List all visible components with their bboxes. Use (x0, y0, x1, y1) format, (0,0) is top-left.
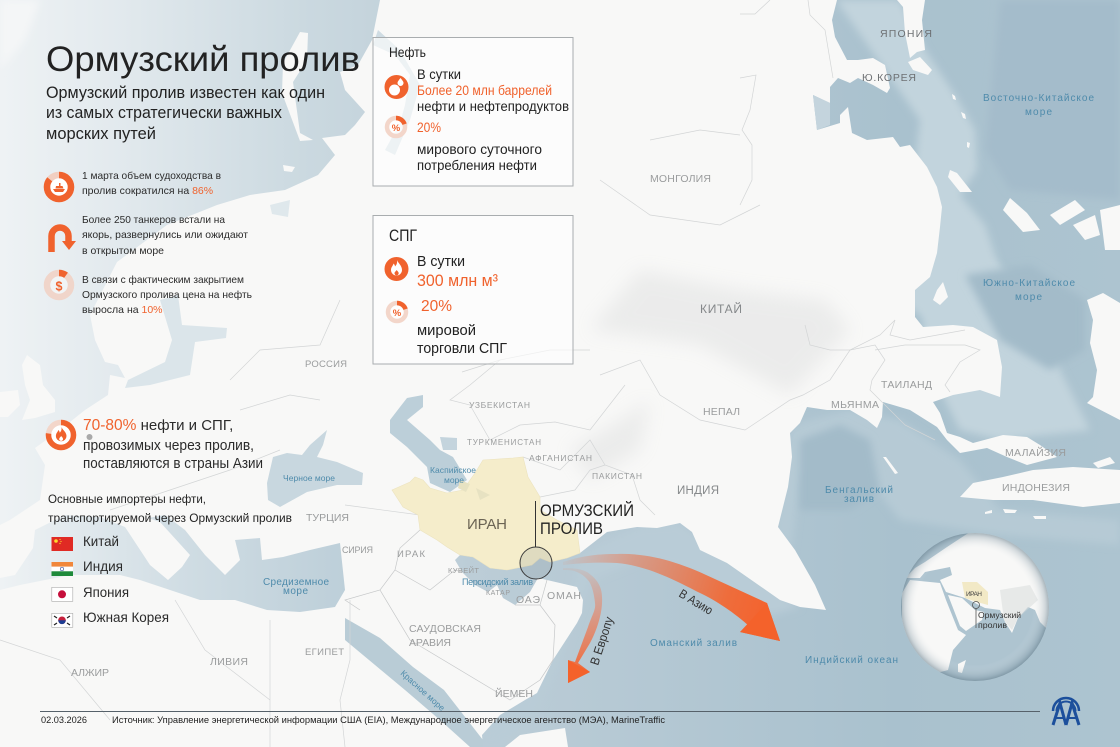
text: oil price: В связи с фактическим закрытием (82, 274, 244, 286)
text: tankers: якорь, развернулись или ожидают (82, 229, 248, 241)
label: Japan: Япония (83, 584, 129, 600)
map labels: seas: залив (844, 494, 874, 505)
map labels: countries: СИРИЯ (342, 545, 373, 555)
arctic haze (0, 0, 40, 70)
map labels: countries: ЕГИПЕТ (305, 647, 344, 658)
label: South Korea: Южная Корея (83, 609, 169, 625)
map labels: countries: ТУРКМЕНИСТАН (467, 438, 541, 447)
flag: Japan (52, 587, 73, 601)
icon: LNG percent ring (388, 303, 406, 321)
map labels: seas: Индийский океан (805, 655, 898, 666)
text: LNG share: торговли СПГ (417, 341, 507, 357)
map labels: seas: Черное море (283, 473, 335, 483)
importers list (52, 533, 169, 627)
continental shelf shading (470, 0, 1120, 747)
map labels: countries: МЬЯНМА (831, 399, 879, 411)
map labels: seas: Каспийское (430, 465, 476, 475)
map labels: countries: КУВЕЙТ (448, 566, 479, 575)
label: China: Китай (83, 533, 119, 549)
Iran label: ИРАН (467, 516, 507, 533)
text: exports to Asia: поставляются в страны Азии (83, 455, 263, 472)
map labels: countries: ЯПОНИЯ (880, 28, 932, 40)
icon: dollar ring: $ (56, 280, 63, 294)
label: to Asia: В Азию (676, 587, 715, 618)
subtitle: морских путей (46, 125, 156, 143)
globe marker (972, 602, 980, 628)
fact: exports to Asia (48, 417, 263, 472)
text: shipping traffic (82, 170, 221, 197)
icon: flame (384, 257, 408, 281)
text: oil price: Ормузского пролива цена на нефть (82, 289, 253, 301)
label: Strait of Hormuz (540, 501, 634, 538)
arrow: to Europe (563, 568, 617, 683)
text: oil per day: нефти и нефтепродуктов (417, 99, 569, 114)
map labels: seas: Красное море (399, 668, 447, 713)
footer rule (40, 710, 1040, 712)
map labels: seas: Средиземное (263, 577, 329, 588)
text: exports to Asia (83, 417, 263, 472)
text: LNG per day: В сутки (417, 254, 465, 270)
map labels: countries: НЕПАЛ (703, 406, 740, 418)
Iran on globe (962, 582, 988, 605)
icon: flame ring (48, 422, 92, 448)
importers heading (48, 492, 292, 525)
map labels: countries: УЗБЕКИСТАН (469, 400, 530, 410)
text: oil price (82, 274, 253, 316)
map labels: countries: ИРАК (397, 549, 425, 560)
importers heading: транспортируемой через Ормузский пролив (48, 511, 292, 525)
map labels: countries: ЙЕМЕН (495, 687, 533, 700)
panel: LNG (373, 216, 573, 364)
fact: tankers (52, 214, 248, 257)
heading: oil: Нефть (389, 45, 426, 60)
fact: oil price (47, 273, 253, 316)
map labels: seas: море (283, 586, 308, 597)
map labels: countries: Ю.КОРЕЯ (862, 72, 916, 84)
map labels: countries: РОССИЯ (305, 359, 347, 370)
map labels: countries: МАЛАЙЗИЯ (1005, 446, 1066, 459)
map labels: countries: ИНДИЯ (677, 485, 719, 497)
text: tankers: Более 250 танкеров встали на (82, 214, 225, 226)
fact: shipping traffic (47, 170, 221, 199)
map labels: countries: КИТАЙ (700, 301, 742, 316)
text: shipping traffic: 1 марта объем судоходства в (82, 170, 221, 182)
title: Ормузский пролив (46, 40, 360, 79)
icon: dollar ring (47, 273, 71, 297)
label: to Europe: В Европу (588, 614, 617, 667)
text: oil per day: В сутки (417, 67, 461, 82)
text: oil share: 20% (417, 120, 441, 135)
map labels: countries: КАТАР (486, 590, 510, 597)
map labels: countries: АРАВИЯ (409, 637, 451, 649)
globe label: Iran: ИРАН (966, 591, 982, 598)
text: tankers: в открытом море (82, 245, 164, 257)
flag: China (52, 537, 73, 551)
text: LNG per day (417, 254, 498, 290)
text: oil per day (417, 67, 569, 114)
map labels: seas: Южно-Китайское (983, 278, 1075, 289)
map labels: countries: САУДОВСКАЯ (409, 623, 481, 635)
map labels: seas: Оманский залив (650, 638, 737, 649)
icon: oil percent ring: % (392, 123, 401, 134)
footer: source: Источник: Управление энергетической информации США (EIA), Международное энергетическое агентство (МЭА), MarineTraffic (112, 715, 666, 725)
subtitle: Ормузский пролив известен как один (46, 84, 325, 102)
map labels: countries: ПАКИСТАН (592, 471, 642, 481)
text: oil price: выросла на 10% (82, 304, 163, 316)
label: Strait of Hormuz: ПРОЛИВ (540, 519, 603, 538)
terrain shading (570, 270, 850, 480)
map labels: countries: ОАЭ (516, 594, 540, 606)
text: LNG per day: 300 млн м³ (417, 271, 498, 290)
text: oil per day: Более 20 млн баррелей (417, 83, 552, 98)
map labels: countries: ОМАН (547, 590, 581, 602)
map labels: seas: Персидский залив (462, 577, 533, 587)
inland seas (0, 30, 830, 747)
text: oil share: потребления нефти (417, 158, 537, 173)
text: exports to Asia: провозимых через пролив, (83, 437, 254, 454)
text: exports to Asia: 70-80% нефти и СПГ, (83, 417, 233, 434)
text: LNG share (417, 298, 507, 357)
deep water (965, 265, 1085, 370)
text: LNG share: мировой (417, 323, 476, 339)
icon: U-turn arrow (52, 228, 76, 252)
icon: LNG percent ring: % (393, 308, 402, 319)
label: India: Индия (83, 558, 123, 574)
map labels: seas: Восточно-Китайское (983, 93, 1094, 104)
text: LNG share: 20% (421, 298, 452, 315)
map labels: seas: Бенгальский (825, 485, 893, 496)
map labels: countries: МОНГОЛИЯ (650, 173, 711, 185)
map labels: countries: АФГАНИСТАН (529, 453, 592, 463)
footer: date: 02.03.2026 (41, 715, 87, 725)
callout: Strait of Hormuz (520, 501, 634, 579)
icon: ship ring (47, 175, 71, 199)
text: oil share (417, 120, 542, 173)
globe label: Strait of Hormuz: Ормузский (978, 610, 1021, 620)
map labels: seas: море (1015, 292, 1042, 303)
globe label: Strait of Hormuz: пролив (978, 620, 1007, 630)
map labels: countries: ТАИЛАНД (881, 379, 932, 391)
importers heading: Основные импортеры нефти, (48, 492, 206, 506)
icon: oil percent ring (387, 118, 405, 136)
label: Strait of Hormuz: ОРМУЗСКИЙ (540, 501, 634, 520)
flag: India (52, 562, 73, 576)
subtitle (46, 84, 325, 143)
heading: LNG: СПГ (389, 226, 417, 245)
globe label: Strait of Hormuz (978, 610, 1021, 630)
panel: oil (373, 38, 573, 186)
inset globe (901, 530, 1055, 681)
map labels: seas (263, 93, 1094, 713)
icon: oil drops (384, 75, 408, 99)
map labels: countries: ЛИВИЯ (210, 656, 248, 668)
map labels: seas: море (1025, 107, 1052, 118)
map labels: seas: море (444, 475, 464, 485)
text: shipping traffic: пролив сократился на 86% (82, 185, 213, 197)
map labels: countries: ТУРЦИЯ (306, 512, 349, 524)
map labels: countries: ИНДОНЕЗИЯ (1002, 482, 1070, 494)
arrow: to Asia (563, 554, 780, 641)
subtitle: из самых стратегически важных (46, 104, 283, 122)
logo: AA (1053, 698, 1079, 725)
map labels: countries: АЛЖИР (71, 667, 109, 679)
flag: South Korea (52, 613, 73, 627)
Iran highlighted (392, 457, 580, 570)
text: oil share: мирового суточного (417, 142, 542, 157)
text: tankers (82, 214, 248, 257)
